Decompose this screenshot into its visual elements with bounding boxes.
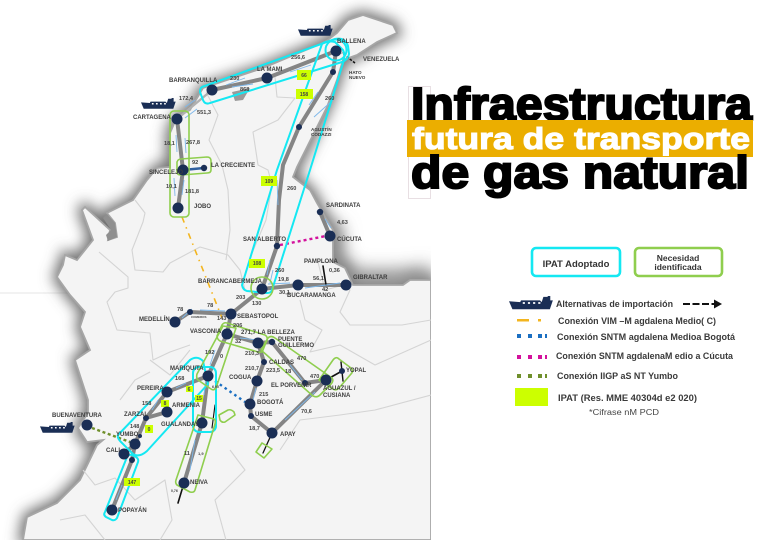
title	[407, 78, 753, 198]
legend: VIM connection: Conexión VIM –M agdalena Medio( C)	[558, 316, 716, 326]
node: Cali	[106, 448, 135, 463]
node: El Porvenir: EL PORVENIR	[271, 383, 312, 389]
node: Usme	[248, 412, 272, 419]
node: Hato Nuevo: HATO	[349, 70, 362, 75]
node: Bogotá	[244, 398, 284, 410]
node: Ballena: BALLENA	[337, 39, 366, 45]
node: Aguazul / Cusiana	[320, 374, 356, 399]
node: Mariquita	[170, 366, 214, 382]
connection: VIM to Magdalena Medio (C)	[182, 217, 222, 318]
node: Agustín Codazzi: CODAZZI	[311, 132, 331, 137]
outlines: IPAT adopted areas	[104, 39, 349, 520]
distance and flow figures: 168	[175, 376, 184, 382]
legend box: Necesidad identificada: Necesidad	[657, 253, 699, 263]
distance and flow figures: 148	[130, 424, 139, 430]
node: La Mami	[257, 67, 283, 84]
node: Pereira: PEREIRA	[137, 386, 164, 392]
legend box: IPAT Adoptado	[532, 248, 620, 276]
distance and flow figures: 56,1	[313, 276, 324, 282]
distance and flow figures: 18,1	[164, 141, 175, 147]
node: Bogotá: BOGOTÁ	[257, 399, 284, 406]
distance and flow figures: 19,8	[278, 277, 289, 283]
node: Gibraltar: GIBRALTAR	[353, 275, 388, 281]
arrow: import from Venezuela	[342, 53, 355, 63]
flow arrows along pipelines	[116, 65, 340, 500]
node: Popayán: POPAYÁN	[118, 507, 147, 514]
distance and flow figures: 203	[236, 295, 245, 301]
IPAT capacity tags: 158	[300, 92, 308, 98]
node: Buenaventura	[52, 413, 103, 430]
node: Cúcuta: CÚCUTA	[337, 236, 363, 243]
node: Cúcuta	[324, 230, 362, 242]
node: Zarzal: ZARZAL	[124, 412, 148, 418]
node: Sincelejo	[149, 164, 188, 176]
node: Puente Guillermo: GUILLERMO	[278, 343, 314, 349]
distance and flow figures: 260	[275, 268, 284, 274]
node: Puente Guillermo: PUENTE	[278, 337, 302, 343]
node: Sardinata: SARDINATA	[326, 203, 361, 209]
distance and flow figures	[130, 55, 348, 493]
title line 2: futura de transporte	[412, 121, 750, 156]
node: Puente Guillermo	[269, 337, 314, 349]
note: figures unit: *Cifrase nM PCD	[589, 408, 659, 417]
map: land	[23, 15, 431, 540]
node: Cimeros	[187, 309, 206, 318]
IPAT capacity tags: 109	[265, 179, 273, 185]
legend: IPAT tag	[515, 388, 697, 406]
node: Aguazul / Cusiana: AGUAZUL /	[323, 386, 356, 392]
node: Neiva: NEIVA	[190, 480, 209, 486]
distance and flow figures: 206	[233, 323, 242, 329]
legend box: Necesidad identificada: identificada	[654, 262, 702, 272]
node: Bucaramanga	[287, 280, 336, 297]
IPAT capacity tags: 0	[148, 427, 151, 433]
node: Jobo	[172, 202, 211, 214]
node: Cimeros: COMEROS	[191, 315, 207, 319]
node: Agustín Codazzi	[296, 124, 332, 137]
connection: SNTM Magdalena Medio to Cúcuta	[280, 236, 326, 245]
node: Hato Nuevo	[330, 69, 366, 80]
node: Cartagena: CARTAGENA	[133, 115, 172, 121]
node: Pereira	[137, 386, 172, 398]
IPAT capacity tags: 15	[196, 396, 202, 402]
legend: Cúcuta connection: Conexión SNTM agdalenaM edio a Cúcuta	[556, 351, 734, 361]
distance and flow figures: 267,8	[186, 140, 200, 146]
distance and flow figures: 130	[252, 301, 261, 307]
connection: IIGP to SNT Yumbo	[92, 428, 130, 442]
map: Ciénaga Grande lagoon	[232, 88, 250, 101]
distance and flow figures: 143	[217, 316, 226, 322]
legend: IPAT tag: IPAT (Res. MME 40304d e2 020)	[558, 393, 697, 403]
node: Barranquilla: BARRANQUILLA	[169, 78, 218, 84]
node: Sebastopol	[226, 308, 279, 320]
node: Neiva	[178, 478, 209, 488]
node: Cali: CALI	[106, 448, 120, 454]
node: Sincelejo: SINCELEJO	[149, 170, 183, 176]
distance and flow figures: 18	[285, 369, 291, 375]
distance and flow figures: 11	[184, 451, 190, 457]
node: Medellín: MEDELLÍN	[139, 315, 170, 323]
node: Cartagena	[133, 114, 182, 124]
node: Apay: APAY	[280, 432, 296, 438]
distance and flow figures: 260	[325, 96, 334, 102]
node: Ballena	[330, 39, 366, 56]
IPAT capacity tags: 66	[301, 73, 307, 79]
node: Jobo: JOBO	[194, 204, 211, 210]
node: La Belleza: 271,7 LA BELLEZA	[241, 330, 295, 336]
distance and flow figures: 0,76	[171, 489, 178, 493]
distance and flow figures: 470	[297, 356, 306, 362]
node: Yopal: YOPAL	[346, 368, 367, 374]
IPAT capacity tags: 108	[253, 261, 261, 267]
distance and flow figures: 230	[230, 76, 239, 82]
distance and flow figures: 7,5	[133, 442, 138, 446]
node: San Alberto	[243, 237, 286, 249]
distance and flow figures: 256,6	[291, 55, 305, 61]
node: Sardinata	[317, 203, 361, 215]
node: Hato Nuevo: NUEVO	[349, 75, 366, 80]
panel: map of Colombia	[0, 15, 431, 540]
map: department borders	[60, 77, 431, 540]
distance and flow figures: 215	[259, 392, 268, 398]
outlines: identified need areas	[170, 111, 352, 492]
distance and flow figures: 18,7	[249, 426, 260, 432]
node: Cogua: COGUA	[229, 375, 252, 381]
node: La Belleza	[241, 330, 295, 348]
node: Armenia: ARMENIA	[172, 403, 201, 409]
node: Barrancabermeja	[198, 279, 268, 294]
node: Gualanday: GUALANDAY	[161, 422, 199, 428]
node: La Mami: LA MAMI	[257, 67, 283, 73]
node: Vasconia	[190, 328, 232, 340]
distance and flow figures: 32	[235, 339, 241, 345]
node: Caldas: CALDAS	[269, 360, 294, 366]
distance and flow figures: 210,3	[245, 351, 259, 357]
node: San Alberto: SAN ALBERTO	[243, 237, 286, 243]
icon: ship Caribbean north	[298, 25, 333, 36]
distance and flow figures: 30,1	[279, 290, 290, 296]
distance and flow figures: 181,8	[185, 189, 199, 195]
distance and flow figures: 172,4	[179, 96, 194, 102]
node: Zarzal	[124, 412, 149, 421]
distance and flow figures: 260	[287, 186, 296, 192]
node: Yumbo	[116, 432, 142, 450]
node: Cogua	[229, 375, 262, 386]
node: Usme: USME	[255, 412, 272, 418]
legend: Yumbo connection: Conexión IIGP aS NT Yumbo	[557, 371, 678, 381]
node: Mariquita: MARIQUITA	[170, 366, 204, 372]
distance and flow figures: 78	[177, 307, 183, 313]
IPAT capacity tags: 6	[188, 387, 191, 393]
node: Vasconia: VASCONIA	[190, 329, 222, 335]
distance and flow figures: 868	[240, 87, 249, 93]
distance and flow figures: 78	[207, 303, 213, 309]
distance and flow figures: 1,9	[198, 451, 204, 456]
distance and flow figures: 192	[205, 350, 214, 356]
node: Gualanday	[161, 418, 208, 428]
node: Caldas	[261, 359, 294, 366]
node: Barrancabermeja: BARRANCABERMEJA	[198, 279, 263, 285]
title band	[407, 120, 753, 157]
distance and flow figures: 70,6	[301, 409, 312, 415]
distance and flow figures: 210,7	[245, 366, 259, 372]
title line 3: de gas natural	[411, 147, 749, 198]
distance and flow figures: 158	[142, 401, 151, 407]
node: Medellín	[139, 315, 180, 328]
node: Gibraltar	[340, 275, 388, 290]
node: Apay	[266, 428, 296, 438]
map: Gulf of Urabá water	[103, 214, 117, 241]
title line 1: Infraestructura	[411, 78, 752, 130]
node: Yumbo: YUMBO	[116, 432, 139, 438]
node: Bucaramanga: BUCARAMANGA	[287, 293, 336, 299]
node: Aguazul / Cusiana: CUSIANA	[323, 393, 351, 399]
legend box: IPAT Adoptado: IPAT Adoptado	[543, 259, 610, 270]
legend: import alternatives	[509, 296, 722, 309]
node: Popayán	[106, 504, 147, 516]
node: La Creciente: LA CRECIENTE	[211, 163, 255, 169]
label: Venezuela: VENEZUELA	[363, 57, 400, 63]
IPAT capacity tags: 8	[164, 401, 167, 407]
node: El Porvenir	[271, 380, 312, 389]
legend: import alternatives: Alternativas de importación	[556, 299, 673, 309]
distance and flow figures: 4,63	[337, 220, 348, 226]
distance and flow figures: 6,95	[212, 385, 219, 389]
distance and flow figures: 92	[192, 160, 198, 166]
node: Armenia	[162, 403, 201, 418]
map: eastern border shadow	[333, 225, 431, 278]
distance and flow figures: 551,3	[197, 110, 211, 116]
node: Buenaventura: BUENAVENTURA	[52, 413, 103, 419]
distance and flow figures: 223,5	[266, 368, 280, 374]
distance and flow figures: 0	[220, 354, 223, 360]
legend box: Necesidad identificada	[635, 248, 722, 276]
label: Pamplona: PAMPLONA	[304, 259, 339, 265]
map: coastline shadow	[23, 15, 431, 540]
distance and flow figures: 470	[310, 374, 319, 380]
distance and flow figures: 10,1	[166, 184, 177, 190]
node: Sebastopol: SEBASTOPOL	[237, 314, 279, 320]
icon: ship Cartagena	[141, 98, 176, 109]
pipelines: gas transport network	[112, 51, 346, 510]
node: Agustín Codazzi: AGUSTÍN	[311, 125, 332, 132]
icon: ship Buenaventura	[40, 422, 75, 433]
distance and flow figures: 42	[322, 287, 328, 293]
IPAT capacity tags	[124, 70, 313, 486]
node: La Creciente	[201, 163, 255, 171]
node: Barranquilla	[169, 78, 218, 96]
connection: SNTM Magdalena Medio to Bogotá	[215, 381, 245, 402]
distance and flow figures: 0,36	[329, 268, 340, 274]
legend: Bogotá connection: Conexión SNTM agdalena Medioa Bogotá	[557, 332, 736, 342]
IPAT capacity tags: 147	[128, 480, 136, 486]
